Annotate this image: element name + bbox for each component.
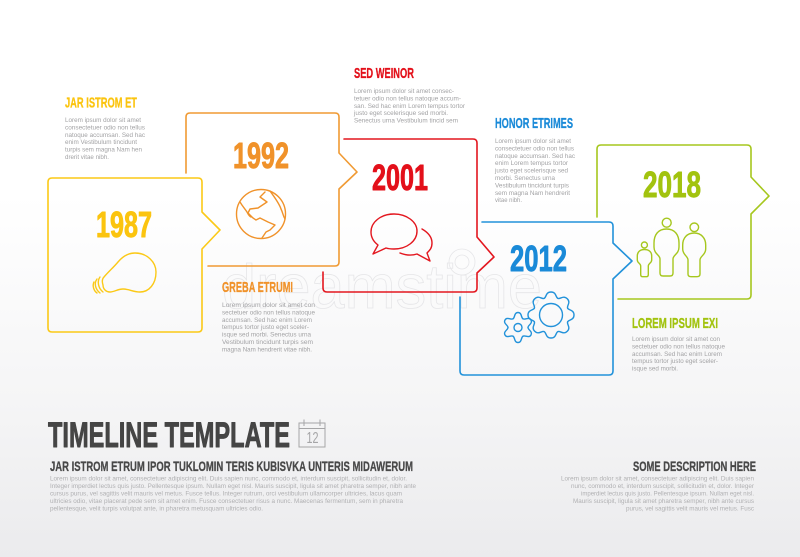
body text: tetuer odio non tellus natoque accum- <box>354 95 461 102</box>
body text: drerit vitae nibh. <box>65 154 109 161</box>
year: 2012: 2012 <box>510 238 567 279</box>
panel outline: 1992 <box>186 113 357 266</box>
watermark: dreamstime <box>222 253 542 322</box>
body text: enim Lorem tempus tortor <box>495 160 568 167</box>
body text: Lorem ipsum dolor sit amet <box>495 138 571 145</box>
body text: Lorem ipsum dolor sit amet con <box>632 336 720 343</box>
body text: Lorem ipsum dolor sit amet consec- <box>354 88 454 95</box>
text block: Honor Etrimes <box>494 116 575 204</box>
heading: Sed Weinor: SED WEINOR <box>354 66 414 82</box>
body text <box>222 302 316 353</box>
body text: purus, vel sagittis velit mauris vel metus. Fusc <box>626 506 754 512</box>
body text: Lorem ipsum dolor sit amet con <box>222 302 316 309</box>
panel: 2018 <box>597 145 769 299</box>
body text: sem magna Nam hendrerit <box>495 190 570 197</box>
body text: accumsan. Sed hac enim Lorem <box>222 317 312 324</box>
heading: Jar Istrom Et: JAR ISTROM ET <box>65 96 137 112</box>
body text: Lorem ipsum dolor sit amet, consectetuer adipiscing elit. Duis sapien nunc, commodo et, interdum suscipit, sollicitudin et, dolor. <box>50 476 407 482</box>
panel: 2001 <box>323 139 494 292</box>
body text: consectetuer odio non tellus <box>495 145 574 152</box>
subtitle: JAR ISTROM ETRUM IPOR TUKLOMIN TERIS KUBISVKA UNTERIS MIDAWERUM <box>50 458 413 474</box>
body text <box>632 336 725 373</box>
body text: sectetuer odio non tellus natoque <box>632 343 725 350</box>
body text: tempus tortor justo eget sceler- <box>632 358 718 365</box>
body text: Lorem ipsum dolor sit amet, consectetuer adipiscing elit. Duis sapien <box>561 476 754 482</box>
body text: sectetuer odio non tellus natoque <box>222 309 315 316</box>
panel outline: 2001 <box>323 139 494 292</box>
heading: Lorem Ipsum Exi: LOREM IPSUM EXI <box>632 316 718 332</box>
body text: magna Nam hendrerit vitae nibh. <box>222 346 312 353</box>
body text: Senectus urna Vestibulum tincid sem <box>354 118 458 125</box>
body text: turpis sem magna Nam hen <box>65 147 142 154</box>
body text: cursus purus, vel sagittis velit mauris vel metus. Fusce tellus. Integer rutrum, orci vestibulum ullamcorper ultricies, lacus quam <box>50 490 402 498</box>
body text: Vestibulum tincidunt turpis sem <box>222 339 313 346</box>
panel: 2012 <box>460 222 632 375</box>
panel: 1987 <box>48 178 220 332</box>
body text: Integer imperdiet lectus quis justo. Pellentesque ipsum. Nullam eget nisl. Mauris suscipit, ligula sit amet pharetra semper, nibh ante <box>50 483 416 490</box>
body text: enim Vestibulum tincidunt <box>65 139 137 146</box>
body text <box>561 476 754 512</box>
body text: san. Sed hac enim Lorem tempus tortor <box>354 103 465 110</box>
text block: Jar Istrom Et <box>65 96 145 161</box>
body text: isque sed morbi. <box>632 366 678 373</box>
body text <box>353 88 465 125</box>
body text: vitae nibh. <box>495 197 522 204</box>
body text: Mauris suscipit, ligula sit amet pharetra semper, nibh ante cursus <box>573 498 754 505</box>
icon: gears <box>503 292 574 342</box>
body text: justo eget scelerisque sed morbi. <box>353 110 448 117</box>
text block: Lorem Ipsum Exi <box>632 316 725 373</box>
year: 2018: 2018 <box>643 164 701 205</box>
body text: Lorem ipsum dolor sit amet <box>65 117 141 124</box>
icon: chat bubbles <box>371 214 432 261</box>
body text: morbi. Senectus urna <box>495 175 555 182</box>
body text: isque sed morbi. Senectus urna <box>222 332 311 339</box>
body text: justo eget scelerisque sed <box>494 168 568 175</box>
panel outline: 2012 <box>460 222 632 375</box>
icon: globe <box>236 190 286 238</box>
panel outline: 2018 <box>597 145 769 299</box>
text block: Sed Weinor <box>353 66 465 125</box>
body text: nunc, commodo et, interdum suscipit, sollicitudin et, dolor. Integer <box>571 483 754 490</box>
text block: some description <box>561 458 756 512</box>
year: 1992: 1992 <box>233 135 289 176</box>
text block: main description <box>50 458 416 512</box>
heading: Honor Etrimes: HONOR ETRIMES <box>495 116 573 132</box>
body text: natoque accumsan. Sed hac <box>65 132 145 139</box>
body text: accumsan. Sed hac enim Lorem <box>632 351 722 358</box>
icon: calendar: 12 <box>306 430 319 447</box>
panel outline: 1987 <box>48 178 220 332</box>
body text: pellentesque, velit turpis volutpat ante, in pharetra metusquam ultricies odio. <box>50 506 263 512</box>
body text: Vestibulum tincidunt turpis <box>495 182 569 189</box>
body text: imperdiet lectus quis justo. Pellentesque ipsum. Nullam eget nisl. <box>581 490 754 498</box>
panel: 1992 <box>186 113 357 266</box>
text block: Greba Etrumi <box>222 280 316 353</box>
year: 1987: 1987 <box>96 204 152 245</box>
body text <box>494 138 575 204</box>
icon: calendar <box>299 420 325 447</box>
body text: natoque accumsan. Sed hac <box>495 153 575 160</box>
icon: light bulb <box>93 253 156 293</box>
year: 2001: 2001 <box>372 157 428 198</box>
body text: tempus tortor justo eget sceler- <box>222 324 309 331</box>
icon: family <box>637 218 706 277</box>
heading: Greba Etrumi: GREBA ETRUMI <box>222 280 293 296</box>
body text: consectetuer odio non tellus <box>65 124 145 131</box>
body text <box>50 476 416 512</box>
body text: ultricies odio, vitae placerat pede sem sit amet enim. Fusce consectetuer risus a nunc. Maecenas fermentum, sem in pharetra <box>50 498 403 505</box>
body text <box>65 117 145 161</box>
title: TIMELINE TEMPLATE <box>48 416 290 455</box>
